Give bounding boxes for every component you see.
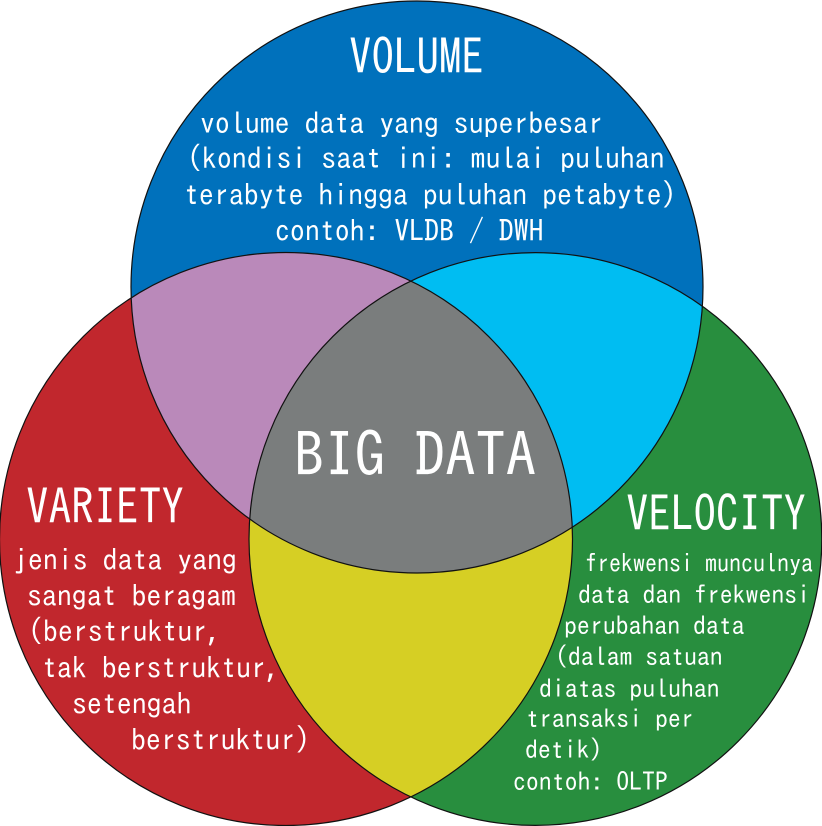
overlap: centre xyxy=(250,282,572,572)
overlap: volume and velocity xyxy=(412,253,702,526)
text block: velocity description xyxy=(513,550,813,795)
heading: velocity: VELOCITY xyxy=(626,488,806,538)
text block: variety description: (berstruktur, xyxy=(28,616,222,646)
heading: variety: VARIETY xyxy=(26,482,184,530)
text block: velocity description: detik) xyxy=(525,737,602,763)
text block: velocity description: diatas puluhan xyxy=(539,676,720,702)
circle: volume xyxy=(131,1,703,573)
text block: velocity description: transaksi per xyxy=(526,706,694,732)
text block: velocity description: contoh: OLTP xyxy=(513,769,668,795)
circle: variety xyxy=(0,252,572,826)
text block: variety description: tak berstruktur, xyxy=(42,652,281,682)
text block: volume description: (kondisi saat ini: mulai puluhan xyxy=(187,143,664,173)
text block: variety description xyxy=(13,544,310,754)
circle: velocity xyxy=(249,253,822,825)
heading: volume: VOLUME xyxy=(349,32,484,80)
text block: variety description: berstruktur) xyxy=(131,724,310,754)
overlap: volume and variety xyxy=(132,253,410,518)
text block: variety description: jenis data yang xyxy=(13,544,237,574)
text block: volume description: contoh: VLDB / DWH xyxy=(275,216,544,246)
text block: volume description: volume data yang superbesar xyxy=(200,108,603,138)
text block: volume description xyxy=(184,108,676,246)
text block: variety description: setengah xyxy=(72,688,191,718)
text block: velocity description: data dan frekwensi xyxy=(578,582,810,608)
heading: big data: BIG DATA xyxy=(294,424,536,485)
text block: volume description: terabyte hingga puluhan petabyte) xyxy=(184,180,676,210)
text block: velocity description: perubahan data xyxy=(564,613,745,639)
overlap: variety and velocity xyxy=(250,520,572,796)
text block: velocity description: (dalam satuan xyxy=(555,644,723,670)
text block: variety description: sangat beragam xyxy=(27,580,236,610)
